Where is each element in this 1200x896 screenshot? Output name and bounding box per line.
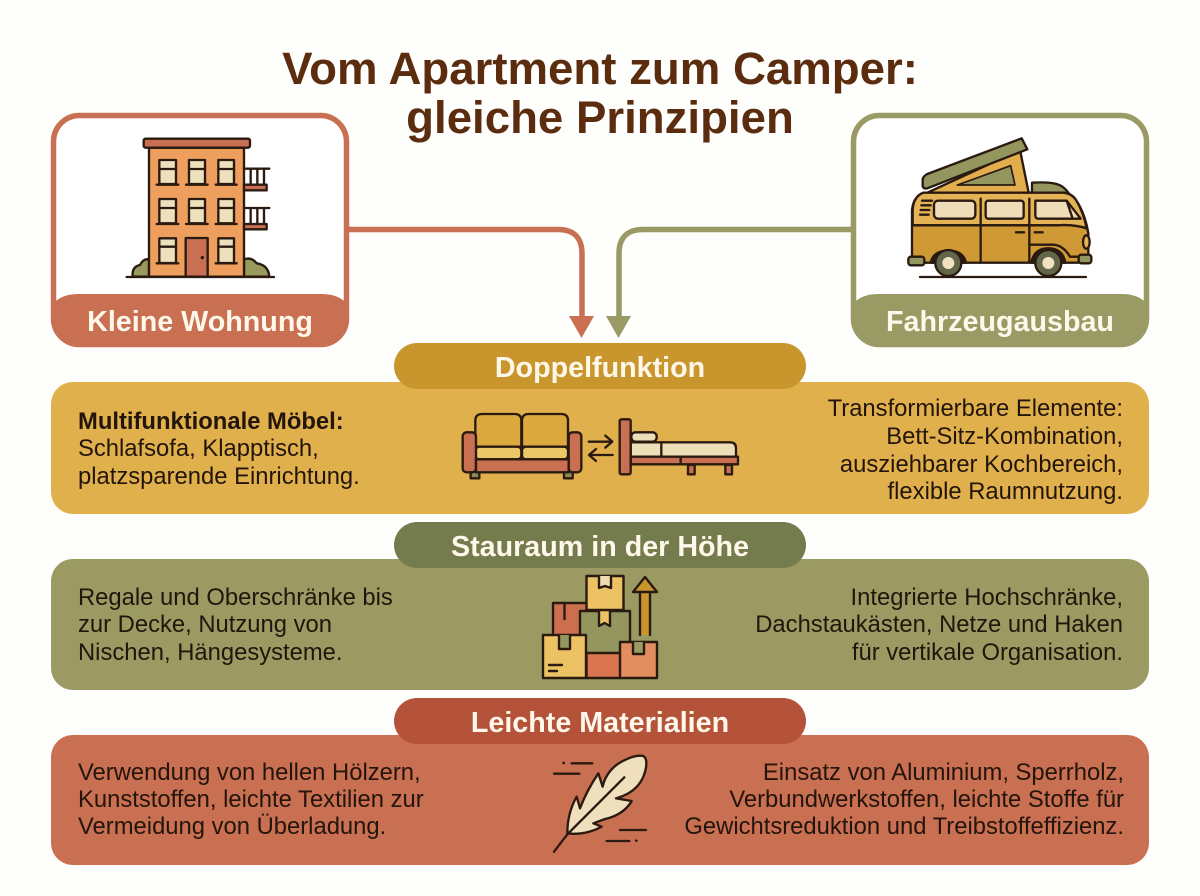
- text: Doppelfunktion left: Schlafsofa, Klapptisch,: [78, 435, 319, 462]
- icon: apartment building: [127, 139, 274, 277]
- panel: Kleine Wohnung: [51, 116, 349, 347]
- title: Vom Apartment zum Camper:: [282, 43, 918, 94]
- icon: camper van: [908, 138, 1091, 277]
- text: Doppelfunktion right: Bett-Sitz-Kombination,: [886, 423, 1123, 450]
- heading pill: Stauraum in der Höhe: Stauraum in der Höhe: [451, 531, 749, 563]
- text: Leichte Materialien right: Gewichtsreduktion und Treibstoffeffizienz.: [684, 813, 1124, 840]
- panel: Fahrzeugausbau: [851, 116, 1149, 347]
- text: Stauraum left: [78, 584, 393, 666]
- icon: stacked boxes with arrow: [543, 576, 657, 678]
- text: Leichte Materialien left: [78, 759, 424, 840]
- text: Stauraum left: Nischen, Hängesysteme.: [78, 639, 343, 666]
- panel: Stauraum in der Höhe: [51, 522, 1149, 690]
- panel: Doppelfunktion: [51, 343, 1149, 514]
- text: Leichte Materialien right: Einsatz von Aluminium, Sperrholz,: [763, 759, 1124, 786]
- text: Stauraum right: [755, 584, 1123, 666]
- label: Fahrzeugausbau: Fahrzeugausbau: [886, 306, 1114, 338]
- title: gleiche Prinzipien: [406, 92, 794, 143]
- icon: feather: [554, 756, 646, 852]
- arrow: camper to centre: [606, 230, 851, 338]
- heading pill: Leichte Materialien: [394, 698, 806, 744]
- text: Stauraum left: zur Decke, Nutzung von: [78, 611, 332, 638]
- label: Kleine Wohnung: Kleine Wohnung: [87, 306, 313, 338]
- text: Leichte Materialien left: Verwendung von hellen Hölzern,: [78, 759, 421, 786]
- text: Stauraum right: Dachstaukästen, Netze und Haken: [755, 611, 1123, 638]
- text: Doppelfunktion left: platzsparende Einrichtung.: [78, 463, 360, 490]
- title: [282, 43, 918, 143]
- heading pill: Doppelfunktion: Doppelfunktion: [495, 352, 705, 384]
- text: Leichte Materialien left: Vermeidung von Überladung.: [78, 813, 386, 840]
- text: Stauraum right: Integrierte Hochschränke,: [851, 584, 1123, 611]
- icon: sofa and bed: [463, 414, 738, 478]
- heading pill: Stauraum in der Höhe: [394, 522, 806, 568]
- text: Leichte Materialien right: Verbundwerkstoffen, leichte Stoffe für: [729, 786, 1124, 813]
- text: Stauraum right: für vertikale Organisation.: [852, 639, 1123, 666]
- text: Doppelfunktion right: [828, 395, 1123, 505]
- text: Stauraum left: Regale und Oberschränke bis: [78, 584, 393, 611]
- text: Doppelfunktion left: Multifunktionale Möbel:: [78, 408, 344, 435]
- text: Doppelfunktion right: Transformierbare Elemente:: [828, 395, 1123, 422]
- heading pill: Leichte Materialien: Leichte Materialien: [471, 707, 729, 739]
- text: Doppelfunktion left: [78, 408, 360, 490]
- text: Doppelfunktion right: flexible Raumnutzung.: [888, 478, 1123, 505]
- panel: Leichte Materialien: [51, 698, 1149, 865]
- heading pill: Doppelfunktion: [394, 343, 806, 389]
- text: Doppelfunktion right: ausziehbarer Kochbereich,: [840, 451, 1123, 478]
- text: Leichte Materialien left: Kunststoffen, leichte Textilien zur: [78, 786, 424, 813]
- arrow: apartment to centre: [349, 230, 594, 338]
- text: Leichte Materialien right: [684, 759, 1124, 840]
